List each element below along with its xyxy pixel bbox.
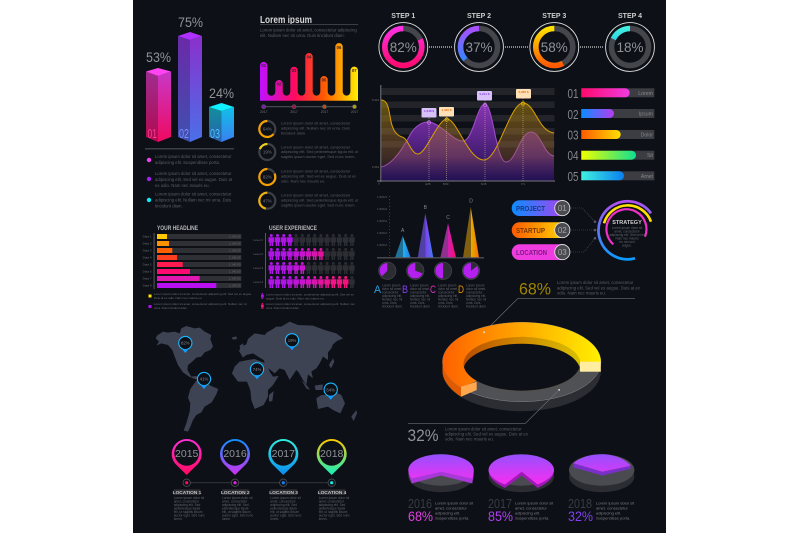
timeline: 2017 xyxy=(351,110,358,114)
location labels: LOCATION 1 xyxy=(173,490,202,496)
axes: 7/1 xyxy=(521,182,525,186)
panel: user experience people chart: Level 2 xyxy=(253,252,263,256)
pie 2016: Lorem ipsum dolor sit xyxy=(435,500,474,506)
location labels xyxy=(173,489,347,496)
letter legend: adipiscing elit, xyxy=(382,294,402,298)
68 percent callout: adipiscing elit. Sed vel ex augue. Duis at ex xyxy=(557,286,641,290)
letter legend: Nullam nec mi xyxy=(466,298,486,302)
bar legend: Lorem ipsum dolor sit amet, consectetur xyxy=(155,192,232,196)
panel: horizontal labelled bars: 03 xyxy=(568,128,578,142)
68 percent callout: odio. Nam nec mauris eu. xyxy=(557,290,606,296)
pillar area chart xyxy=(260,43,358,101)
panel: horizontal labelled bars: 05 xyxy=(568,169,578,184)
location text: auctor eget. Sed nunc xyxy=(270,514,302,518)
letter legend: Lorem ipsum xyxy=(410,284,429,288)
68 percent callout xyxy=(484,280,641,332)
donut row 1: adipiscing elit. Nullam nec mi urna. Duis xyxy=(281,126,350,130)
panel: horizontal labelled bars: Amet xyxy=(641,174,654,180)
letter legend: Nullam nec mi xyxy=(382,298,402,302)
location text: pellentesque ligula xyxy=(270,506,297,510)
location labels: LOCATION 2 xyxy=(221,490,250,496)
pin 2016 xyxy=(220,439,250,486)
pillar area chart: 01 xyxy=(261,63,267,68)
strategy text: Lorem ipsum dolor sit xyxy=(612,226,642,230)
location text: adipiscing elit. Sed xyxy=(174,503,201,507)
small pies xyxy=(379,262,480,279)
pie 2016: amet, consectetur xyxy=(435,506,467,510)
letter legend: D xyxy=(458,284,464,296)
step 1: STEP 1 xyxy=(391,13,415,20)
panel: 3D pies xyxy=(408,454,635,524)
letter legend: dolor sit amet, xyxy=(410,287,430,291)
bar 01: 01 xyxy=(148,126,157,141)
panel: your headline bars: Data 8 xyxy=(143,284,152,288)
timeline: 2017 xyxy=(260,110,268,114)
location text: amet, consectetur xyxy=(174,500,200,504)
location text: amet, consectetur xyxy=(319,500,345,504)
panel: your headline bars: 1,140.00 xyxy=(229,276,241,280)
intro text: elit. Nullam nec mi urna. Duis tincidunt diam. xyxy=(260,33,345,38)
strategy arcs xyxy=(598,201,651,259)
purple series xyxy=(381,104,554,181)
donut row 2: Lorem ipsum dolor sit amet, consectetur xyxy=(281,144,351,150)
letter legend: urna. Duis xyxy=(382,301,397,305)
panel: your headline bars: urna. Duis tincidunt diam. xyxy=(154,306,188,310)
axes: 4/25 xyxy=(425,182,431,186)
pill project: 01 xyxy=(558,204,567,213)
letter legend: Lorem ipsum xyxy=(466,284,485,288)
pin 2017: 2017 xyxy=(272,448,295,460)
donut row 2: 19% xyxy=(263,150,272,155)
row 4 xyxy=(268,276,355,288)
callouts: 1,420 $ xyxy=(441,108,452,112)
bar 02 xyxy=(178,14,203,142)
panel: triangle chart: 1,500.0 xyxy=(377,231,387,235)
bar legend: adipiscing elit. Suspendisse porta. xyxy=(155,160,220,165)
pillar area chart: 03 xyxy=(292,68,297,73)
row 2 xyxy=(268,248,355,260)
map pins: 19% xyxy=(288,338,296,343)
bar legend: tincidunt diam. xyxy=(155,204,183,208)
axes: 0 xyxy=(378,182,380,186)
panel: your headline bars: 1,140.00 xyxy=(229,256,241,260)
bar legend: Lorem ipsum dolor sit amet, consectetur xyxy=(155,154,232,159)
letter legend: consectetur xyxy=(410,290,427,294)
letter legend: Lorem ipsum xyxy=(382,284,401,288)
panel: horizontal labelled bars: Lorem xyxy=(638,91,653,97)
location text: auctor eget. Sed nunc xyxy=(319,514,350,518)
letter legend: tincidunt diam. xyxy=(410,304,431,308)
panel: 3D ring chart xyxy=(408,280,641,445)
pie 2018: Lorem ipsum dolor sit xyxy=(596,500,635,506)
step 2: STEP 2 xyxy=(467,13,491,20)
panel: your headline bars: Duis at ex odio. Nam nec mauris eu. xyxy=(154,296,203,300)
pie 2016: Suspendisse porta. xyxy=(435,516,469,520)
pillar area chart: 02 xyxy=(277,82,282,86)
letter legend: Lorem ipsum xyxy=(438,284,457,288)
bar legend: adipiscing elit. Sed vel ex augue. Duis at xyxy=(155,177,233,182)
location text: auctor eget. Sed nunc xyxy=(174,514,205,518)
bar legend: Lorem ipsum dolor sit amet, consectetur xyxy=(155,171,232,176)
panel: horizontal labelled bars: 04 xyxy=(568,148,578,163)
letter legend: Nullam nec mi xyxy=(438,298,458,302)
location text: pellentesque ligula xyxy=(319,506,345,510)
panel: user experience people chart: USER EXPERIENCE xyxy=(269,226,317,232)
pie 2017: 2017 xyxy=(488,496,512,511)
location text: auctor eget. Sed nunc xyxy=(222,514,254,518)
location text: elit, ut sagittis ipsum xyxy=(222,510,251,514)
panel: your headline bars: Data 4 xyxy=(143,256,152,260)
pin 2018: 2018 xyxy=(320,448,344,460)
bar 01 xyxy=(146,49,171,142)
map pins xyxy=(179,334,337,400)
pie 2017: 85% xyxy=(488,508,513,524)
panel: 3D bar chart xyxy=(145,14,234,208)
donut row 3: Lorem ipsum dolor sit amet, consectetur xyxy=(281,168,351,174)
letter legend: B xyxy=(402,284,408,296)
location text: Lorem ipsum dolor sit xyxy=(319,496,349,500)
triangle D: D xyxy=(469,198,473,204)
step 3: 58% xyxy=(541,40,568,55)
panel: triangle chart xyxy=(374,195,487,308)
panel: triangle chart: 1,500.0 xyxy=(377,219,387,223)
pie 2018: 32% xyxy=(568,508,593,524)
pill location: LOCATION xyxy=(516,248,547,257)
location text: adipiscing elit. Sed xyxy=(319,503,346,507)
strategy text: STRATEGY xyxy=(612,220,642,226)
pie 2018 xyxy=(568,454,635,524)
pie 2016: adipiscing elit. xyxy=(435,510,460,516)
32 percent callout: 32% xyxy=(408,426,438,445)
panel: lorem ipsum chart xyxy=(259,15,359,209)
location text: amet, consectetur xyxy=(270,500,297,504)
location text xyxy=(174,496,350,521)
bar 03: 03 xyxy=(210,126,220,141)
donut row 1 xyxy=(259,120,351,137)
continents xyxy=(156,322,357,432)
pie 2017 xyxy=(488,454,554,524)
location text: amet, consectetur xyxy=(222,500,248,504)
location text: adipiscing elit. Sed xyxy=(222,503,249,507)
location labels: LOCATION 3 xyxy=(269,490,298,496)
32 percent callout: Lorem ipsum dolor sit amet, consectetur xyxy=(445,426,522,432)
location labels: LOCATION 4 xyxy=(318,490,347,496)
panel: your headline bars: Data 2 xyxy=(143,242,152,246)
row 3 xyxy=(268,262,355,274)
axes: 6/15 xyxy=(481,182,487,186)
location text: pellentesque ligula xyxy=(222,506,249,510)
panel: your headline bars: Data 3 xyxy=(143,248,152,252)
letter legend: urna. Duis xyxy=(410,301,425,305)
pill location: 03 xyxy=(558,248,567,257)
letter legend: urna. Duis xyxy=(438,301,453,305)
donut row 4: adipiscing elit. Sed pellentesque ligula elit, ut xyxy=(281,198,359,202)
triangle B: B xyxy=(424,205,428,211)
bar 02: 02 xyxy=(179,126,189,141)
letter legend: dolor sit amet, xyxy=(382,287,402,291)
pie 2017: Lorem ipsum dolor sit xyxy=(515,500,554,506)
step 1 xyxy=(379,13,428,71)
pill startup xyxy=(512,222,570,238)
panel: your headline bars: Data 5 xyxy=(143,262,152,266)
panel: your headline bars: Data 7 xyxy=(143,276,152,280)
letter legend: consectetur xyxy=(466,290,483,294)
bar legend: adipiscing elit. Nullam nec mi urna. Duis xyxy=(155,198,231,202)
axes: 5,441 xyxy=(372,98,379,102)
panel: user experience people chart: urna. Duis tincidunt diam. xyxy=(266,306,300,310)
panel: user experience people chart: Level 3 xyxy=(253,266,263,270)
strategy text: adipiscing elit. Sed vel ex xyxy=(609,233,645,237)
panel: horizontal labelled bars: Sit xyxy=(647,153,654,159)
timeline: 2017 xyxy=(321,110,328,114)
panel: user experience people chart: Level 4 xyxy=(253,280,263,284)
pill project xyxy=(512,200,570,216)
panel: your headline bars: Data 1 xyxy=(143,234,152,238)
bar legend: ex odio. Nam nec mauris eu. xyxy=(155,183,210,188)
panel: steps xyxy=(379,13,654,71)
location text: lorem. xyxy=(270,517,279,521)
step 3: STEP 3 xyxy=(542,13,566,20)
bar 01: 53% xyxy=(146,49,171,65)
donut row 4: 47% xyxy=(263,198,272,203)
panel: your headline bars: 1,140.00 xyxy=(229,262,241,266)
pin 2015 xyxy=(172,439,202,486)
step 3 xyxy=(530,13,579,71)
location text: lorem. xyxy=(174,517,183,521)
location text: Lorem ipsum dolor sit xyxy=(174,496,204,500)
panel: horizontal labelled bars xyxy=(568,86,654,184)
letter legend: tincidunt diam. xyxy=(382,304,403,308)
location text: lorem. xyxy=(319,517,328,521)
panel: user experience people chart: Lorem ipsum dolor sit amet, consectetur adipiscing elit. Sed vel ex xyxy=(266,292,354,296)
letter legend: adipiscing elit, xyxy=(410,294,430,298)
panel: your headline bars: 1,140.00 xyxy=(229,242,241,246)
panel: world map xyxy=(156,322,357,432)
donut row 1: Lorem ipsum dolor sit amet, consectetur xyxy=(281,120,351,126)
pie 2018: adipiscing elit. xyxy=(596,510,621,516)
step 4: STEP 4 xyxy=(618,13,642,20)
triangle A: A xyxy=(401,228,405,234)
map pins: 74% xyxy=(253,367,261,372)
strategy text xyxy=(609,220,645,248)
panel: your headline bars: 1,140.00 xyxy=(229,270,241,274)
step 4 xyxy=(606,13,654,71)
donut row 2: sagittis ipsum auctor eget. Sed nunc lorem. xyxy=(281,154,356,159)
pie 2018: Suspendisse porta. xyxy=(596,516,630,520)
letter legend: Nullam nec mi xyxy=(410,298,430,302)
panel: your headline bars xyxy=(143,226,252,310)
timeline: 2017 xyxy=(290,110,298,114)
32 percent callout: adipiscing elit. Sed vel ex augue. Duis at ex xyxy=(445,432,529,436)
panel: your headline bars: Lorem ipsum dolor sit amet, consectetur adipiscing elit. Nullam nec mi xyxy=(154,302,247,306)
68 percent callout: 68% xyxy=(519,280,551,298)
panel: your headline bars: 1,140.00 xyxy=(229,248,241,252)
donut row 2: adipiscing elit. Sed pellentesque ligula elit, ut xyxy=(281,149,359,154)
location text: adipiscing elit. Sed xyxy=(270,503,297,507)
location text: elit, ut sagittis ipsum xyxy=(319,510,348,514)
pin 2016: 2016 xyxy=(223,448,247,460)
location text: pellentesque ligula xyxy=(174,506,200,510)
panel: horizontal labelled bars: Ipsum xyxy=(639,112,653,118)
callouts xyxy=(422,89,531,181)
strategy text: augue. xyxy=(622,244,632,248)
location text: Lorem ipsum dolor sit xyxy=(222,496,253,500)
donut row 3 xyxy=(259,168,356,185)
intro text xyxy=(260,28,357,38)
panel: strategy xyxy=(512,200,651,260)
panel: horizontal labelled bars: Dolor xyxy=(641,132,653,138)
pillar area chart: 04 xyxy=(307,54,312,60)
pin 2018 xyxy=(317,439,347,486)
pie 2016: 2016 xyxy=(408,496,432,511)
68 percent callout: Lorem ipsum dolor sit amet, consectetur xyxy=(557,280,634,285)
pin 2015: 2015 xyxy=(175,448,199,460)
letter legend: dolor sit amet, xyxy=(466,287,486,291)
32 percent callout: odio. Nam nec mauris eu. xyxy=(445,436,494,442)
panel: your headline bars: Data 6 xyxy=(143,270,152,274)
strategy text: amet, consectetur xyxy=(614,230,641,234)
strategy text: Nam nec mauris xyxy=(615,236,639,240)
pill startup: STARTUP xyxy=(516,226,545,235)
triangle C: C xyxy=(446,215,450,221)
pie 2018: amet, consectetur xyxy=(596,506,628,510)
pillar area chart: 07 xyxy=(352,68,357,73)
panel: triangle chart: 1,500.0 xyxy=(377,207,387,211)
page background xyxy=(133,0,666,533)
heading: Lorem ipsum xyxy=(260,15,312,26)
pill location xyxy=(512,244,570,260)
pill project: PROJECT xyxy=(516,204,545,213)
axes: 2,041 xyxy=(372,165,379,169)
callouts: 5,285 $ xyxy=(518,90,529,94)
pill startup: 02 xyxy=(558,226,567,235)
panel: triangle chart: 1,500.0 xyxy=(377,195,387,199)
panel: user experience people chart: augue. Duis at ex odio. Nam nec mauris eu. xyxy=(266,296,325,300)
donut row 3: odio. Nam nec mauris eu. xyxy=(281,178,325,184)
letter legend: tincidunt diam. xyxy=(438,304,459,308)
pie 2016 xyxy=(408,454,474,524)
donut row 4: Lorem ipsum dolor sit amet, consectetur xyxy=(281,192,351,198)
letter legend: tincidunt diam. xyxy=(466,304,487,308)
pillar area chart: 06 xyxy=(337,45,342,50)
panel: horizontal labelled bars: 02 xyxy=(568,107,578,122)
letter legend: adipiscing elit, xyxy=(438,294,458,298)
axes: 5/03 xyxy=(443,182,449,186)
map pins: 64% xyxy=(326,387,335,392)
bar 03: 24% xyxy=(209,85,234,101)
donut row 1: tincidunt diam. xyxy=(281,130,306,136)
pin 2017 xyxy=(268,439,298,486)
map pins: 41% xyxy=(200,377,208,382)
ring xyxy=(442,322,601,411)
pillar area chart: 05 xyxy=(322,78,327,82)
panel: horizontal labelled bars: 01 xyxy=(568,86,578,101)
map pins: 82% xyxy=(181,341,190,346)
pie 2017: Suspendisse porta. xyxy=(515,516,549,520)
panel: user experience people chart: Lorem ipsum dolor sit amet, consectetur adipiscing elit. Nullam nec xyxy=(266,302,355,306)
callouts: 1,348 $ xyxy=(424,109,434,113)
letter legend: A xyxy=(374,284,382,296)
letter legend: C xyxy=(430,284,436,296)
bar 03 xyxy=(209,85,234,142)
letter legend: adipiscing elit, xyxy=(466,294,486,298)
step 1: 82% xyxy=(390,40,417,55)
pie 2017: adipiscing elit. xyxy=(515,510,540,516)
location text: elit, ut sagittis ipsum xyxy=(270,510,299,514)
pie 2018: 2018 xyxy=(568,496,592,511)
location text: lorem. xyxy=(222,517,231,521)
step 2 xyxy=(455,13,503,71)
gold series xyxy=(381,100,554,181)
step 2: 37% xyxy=(465,40,493,55)
pie 2017: amet, consectetur xyxy=(515,506,547,510)
location text: elit, ut sagittis ipsum xyxy=(174,510,203,514)
donut row 3: adipiscing elit. Sed vel ex augue. Duis at ex xyxy=(281,174,356,178)
donut row 1: 64% xyxy=(263,127,272,132)
bar 02: 75% xyxy=(178,14,203,30)
panel: location timeline xyxy=(172,439,350,521)
panel: your headline bars: 1,140.00 xyxy=(229,234,241,238)
location text: Lorem ipsum dolor sit xyxy=(270,496,301,500)
donut row 3: 82% xyxy=(263,175,272,180)
timeline xyxy=(260,105,358,114)
axes xyxy=(372,85,555,186)
32 percent callout xyxy=(408,390,559,445)
panel: triangle chart: 1,500.0 xyxy=(377,243,387,247)
panel: user experience people chart: Level 1 xyxy=(253,238,263,242)
step 4: 18% xyxy=(616,40,644,55)
panel: your headline bars: 1,140.00 xyxy=(229,284,241,288)
connectors xyxy=(571,208,595,252)
panel: user experience people chart xyxy=(253,226,355,310)
panel: area line chart xyxy=(372,85,555,186)
callouts: 5,241 $ xyxy=(479,92,490,96)
pie 2016: 68% xyxy=(408,508,433,524)
letter legend: consectetur xyxy=(438,290,455,294)
donut row 4 xyxy=(259,192,359,209)
bar legend xyxy=(147,154,233,208)
donut row 4: sagittis ipsum auctor eget. Sed nunc lorem. xyxy=(281,202,356,208)
row 1 xyxy=(268,234,355,246)
strategy text: eu nisi sed xyxy=(619,240,635,244)
intro text: Lorem ipsum dolor sit amet, consectetur adipiscing xyxy=(260,28,357,32)
letter legend: urna. Duis xyxy=(466,301,481,305)
panel: your headline bars: Lorem ipsum dolor sit amet, consectetur adipiscing elit. Sed vel ex augue. xyxy=(154,292,252,296)
letter legend xyxy=(374,284,487,308)
letter legend: dolor sit amet, xyxy=(438,287,458,291)
letter legend: consectetur xyxy=(382,290,399,294)
panel: your headline bars: YOUR HEADLINE xyxy=(157,226,198,232)
donut row 2 xyxy=(259,144,359,160)
